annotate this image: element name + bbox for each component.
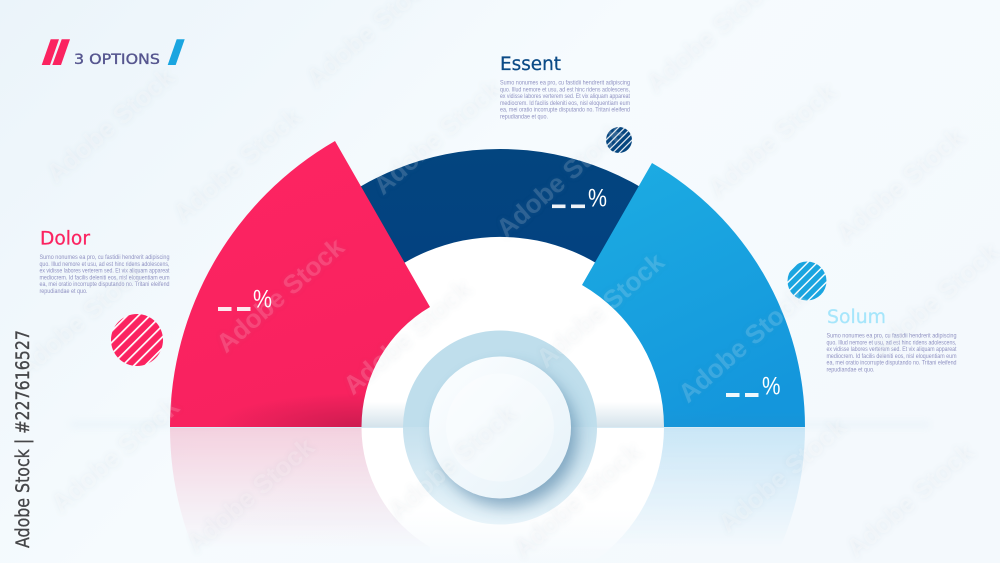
body text: ea, mei oratio incorrupte disputando no. Tritani eleifend — [500, 106, 630, 114]
body text: ea, mei oratio incorrupte disputando no. Tritani eleifend — [826, 360, 957, 366]
body text: ex vidisse labores verterem sed. Et vix aliquam appareat — [826, 346, 957, 353]
value: Dolor percent: % — [253, 286, 272, 314]
watermarks: Adobe Stock — [830, 121, 970, 248]
segment: Essent — [303, 149, 697, 293]
segment: Dolor — [170, 141, 430, 427]
header: 3 options — [42, 39, 185, 68]
watermarks: Adobe Stock — [40, 61, 180, 188]
watermarks: Adobe Stock — [180, 431, 320, 558]
body text: Sumo nonumes ea pro, cu fastidii hendrerit adipiscing — [500, 80, 630, 86]
heading: Essent — [500, 54, 561, 75]
upper ring — [403, 330, 597, 427]
watermarks: Adobe Stock — [45, 391, 185, 518]
segment: Solum — [582, 163, 805, 427]
disc inner glow — [446, 374, 554, 482]
body text: ex vidisse labores verterem sed. Et vix aliquam appareat — [500, 93, 630, 100]
reflected Solum — [634, 428, 805, 523]
white inner reflection — [361, 427, 664, 563]
value: Essent percent: % — [588, 184, 607, 212]
watermarks: Adobe Stock — [367, 73, 507, 200]
body text: Sumo nonumes ea pro, cu fastidii hendrerit adipiscing — [40, 254, 170, 261]
body text — [500, 80, 630, 120]
value: Solum percent: % — [762, 372, 780, 400]
body text: mediocrem. Id facilis deleniti eos, nisl eloquentiam eum — [500, 100, 630, 107]
icon: blue slash — [168, 39, 185, 65]
body text: mediocrem. Id facilis deleniti eos, nisl eloquentiam eum — [40, 274, 170, 281]
body text: ex vidisse labores verterem sed. Et vix aliquam appareat — [40, 268, 170, 274]
value: Solum percent — [726, 372, 780, 400]
reflection of chart — [170, 428, 805, 523]
block: Dolor — [40, 228, 170, 295]
center disc — [429, 356, 571, 498]
watermarks: Adobe Stock — [382, 398, 522, 525]
watermarks: Adobe Stock — [530, 246, 670, 373]
watermarks: Adobe Stock — [167, 101, 307, 228]
value: Dolor percent — [218, 286, 272, 314]
baseline — [170, 427, 805, 428]
reflected Dolor — [170, 428, 399, 523]
watermarks: Adobe Stock — [490, 116, 630, 243]
body text — [826, 332, 957, 373]
block: Essent — [500, 54, 630, 120]
icon: blue striped circle — [788, 262, 826, 300]
block: Solum — [826, 307, 957, 373]
body text: repudiandae et quo. — [826, 366, 875, 373]
baseline shading — [212, 393, 805, 427]
watermarks: Adobe Stock — [10, 256, 150, 383]
body text: quo. Illud nemore et usu, ad est hinc ridens adolescens, — [500, 86, 630, 93]
watermarks: Adobe Stock — [702, 76, 842, 203]
watermarks: Adobe Stock — [712, 411, 852, 538]
watermarks: Adobe Stock — [840, 436, 980, 563]
body text — [40, 254, 170, 295]
body text: mediocrem. Id facilis deleniti eos, nisl eloquentiam eum — [826, 353, 956, 360]
horizon shadow — [70, 422, 930, 427]
body text: quo. Illud nemore et usu, ad est hinc ridens adolescens, — [826, 339, 957, 346]
body text: quo. Illud nemore et usu, ad est hinc ridens adolescens, — [40, 261, 170, 268]
icon: navy striped circle — [606, 127, 632, 153]
center ring — [403, 330, 597, 524]
watermarks: Adobe Stock — [337, 273, 477, 400]
center disc shadow — [437, 367, 577, 507]
white inner disc — [310, 237, 690, 427]
semicircle chart — [170, 141, 805, 427]
lower ring reflection — [403, 427, 597, 524]
heading text: 3 OPTIONS — [74, 52, 160, 68]
icon: red slashes — [42, 39, 70, 65]
value: Essent percent — [552, 184, 607, 212]
watermarks: Adobe Stock — [210, 231, 350, 358]
heading: Dolor — [40, 228, 90, 250]
body text: repudiandae et quo. — [500, 113, 548, 120]
body text: ea, mei oratio incorrupte disputando no. Tritani eleifend — [40, 281, 170, 288]
watermarks: Adobe Stock — [672, 281, 812, 408]
body text: repudiandae et quo. — [40, 288, 88, 295]
disc outer — [429, 356, 571, 498]
body text: Sumo nonumes ea pro, cu fastidii hendrerit adipiscing — [826, 332, 957, 340]
icon: red striped circle — [111, 314, 163, 366]
stock id sidebar: Adobe Stock | #227616527 — [13, 330, 34, 548]
heading: Solum — [827, 307, 886, 328]
watermarks: Adobe Stock — [507, 436, 647, 563]
